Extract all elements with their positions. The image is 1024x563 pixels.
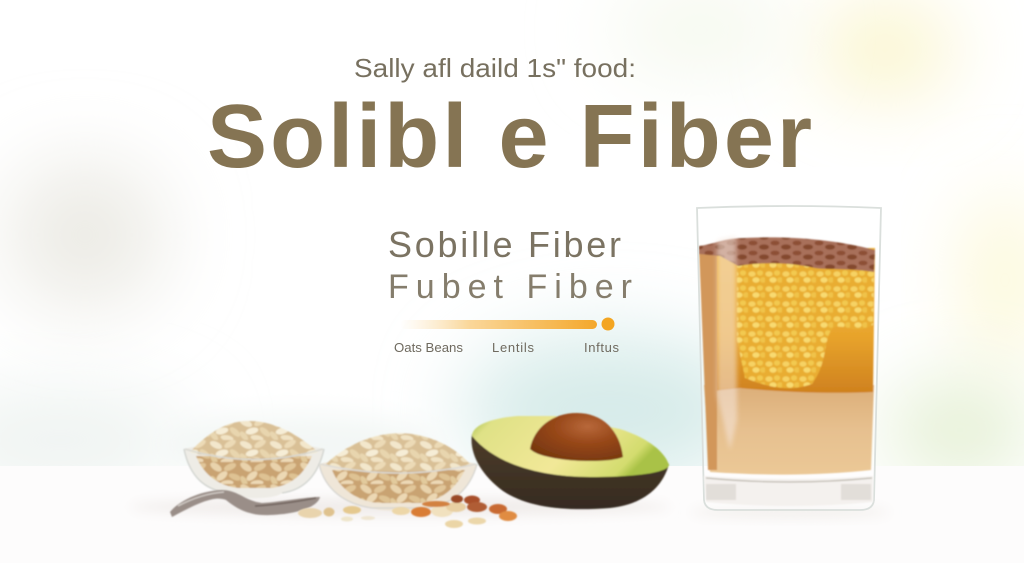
progress bar bbox=[400, 318, 614, 330]
avocado half bbox=[472, 413, 669, 509]
scattered seeds and nuts bbox=[298, 495, 517, 528]
glass highlight bbox=[717, 236, 737, 450]
spoon bbox=[170, 490, 320, 517]
table surface bbox=[0, 466, 1024, 563]
glass base bbox=[704, 476, 873, 506]
label: oats beans: Oats Beans bbox=[394, 340, 463, 355]
secondary heading: Sobille Fiber bbox=[388, 224, 621, 265]
drink layers bbox=[699, 237, 875, 475]
glass outline bbox=[697, 206, 881, 510]
subtitle: Sally afl daild 1s" food: bbox=[354, 53, 636, 83]
avocado pit bbox=[530, 413, 623, 461]
label: inftus: Inftus bbox=[584, 340, 620, 355]
bowl of oats, right bbox=[319, 433, 477, 511]
secondary heading line 2: Fubet Fiber bbox=[388, 268, 632, 306]
label: lentils: Lentils bbox=[492, 340, 534, 355]
title: Solibl e Fiber bbox=[207, 87, 812, 187]
glass of layered fiber drink bbox=[697, 206, 881, 510]
bowl of oats, left bbox=[184, 421, 324, 498]
